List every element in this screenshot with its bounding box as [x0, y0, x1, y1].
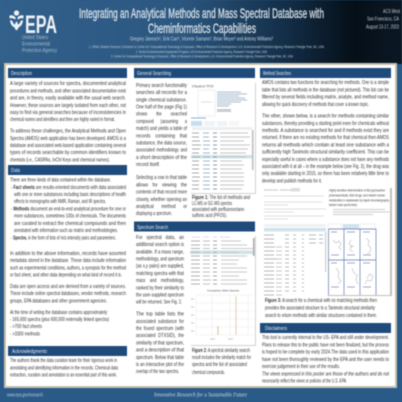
text: description: A large variety of sources for spectra, documented analytical [10, 81, 126, 87]
text: general searching [136, 83, 188, 217]
right column [260, 68, 392, 385]
text: spectrum search: mass and methodology, [136, 278, 184, 284]
heading: Data [8, 165, 127, 175]
text: metadata and sources: - 165,000 spectra (plus 600,000 externally linked spectra) [10, 317, 109, 323]
text: metadata and sources: - >3300 methods [10, 332, 40, 338]
heading: Acknowledgments: Acknowledgments [12, 349, 47, 355]
figure 1 caption [192, 195, 250, 219]
text: general searching: match) and yields a table of [136, 126, 187, 132]
affiliations: 2. Senior Environmental Employment Program, US Environmental Protection Agency, Research Triangle Park, USA [136, 50, 268, 54]
text: description: and are, in theory, easily available with the usual web search. [10, 96, 126, 102]
text: spectrum search: additional search option is [136, 242, 184, 248]
figure 1 caption: LC-MS or GC-MS spectra [192, 201, 232, 207]
figure 1: PFOS results screenshot [190, 82, 256, 194]
text: general searching: Selecting a row in that table [136, 175, 187, 181]
text: general searching: One half of the page (Fig 1) [136, 104, 187, 110]
text: disclaimers [262, 335, 389, 385]
figure 1 caption: sulfonic acid (PFOS). [192, 213, 227, 219]
text: spectrum search: is an interactive plot of the [136, 362, 184, 368]
text: disclaimers: exercise judgement in their use of the results. [262, 364, 340, 370]
text: spectrum search: and a description of that [136, 348, 184, 354]
text: spectrum search: the found spectrum (with [136, 326, 184, 332]
figure 1: PFOS results screenshot: 5 Results for "PFOS" [192, 84, 215, 88]
card title [329, 188, 389, 207]
conference info [366, 9, 400, 30]
footer url: www.epa.gov/research [6, 392, 43, 398]
text: spectrum search: The top table lists the [136, 312, 184, 318]
text: description: procedures and methods, and other associated documentation exist [10, 88, 126, 94]
text: general searching: single chemical substance. [136, 97, 187, 103]
heading: Method Searches: Method Searches [263, 71, 291, 77]
text: data kinds: effects to monographs with NMR, Raman, and IR spectra. [14, 199, 106, 205]
card tabs [328, 224, 375, 229]
text: data kinds: with one or more substances including basic descriptions of health [13, 192, 126, 198]
text: metadata and sources: These include online spectral databases, vendor methods, research [10, 291, 126, 297]
text: metadata and sources: Data are open access and are derived from a variety of sources. [10, 284, 126, 290]
heading: Description: Description [11, 71, 32, 77]
text: general searching: substance, the data source, [136, 140, 187, 146]
text: general searching: displaying a spectrum. [136, 211, 172, 217]
text: spectrum search: similarity of that spectrum, [136, 340, 184, 346]
text: spectrum search: overlap of the two spectra. [136, 369, 179, 375]
text: metadata and sources: - >700 fact sheets [10, 324, 42, 330]
heading: Method Searches [260, 68, 391, 78]
text: data kinds: more substances, sometimes 100s of chemicals. The documents [14, 214, 126, 220]
heading: Spectrum Search [134, 222, 255, 232]
text: description: To address these challenges, the Analytical Methods and Open [10, 129, 126, 135]
text: data kinds: annotated with information such as matrix and methodologies. [14, 228, 118, 234]
text: description: types of records searchable by common identifiers known to [10, 150, 126, 156]
card title: tandem mass spectrometry [329, 202, 357, 207]
heading: Acknowledgments [8, 346, 127, 356]
agency name [22, 35, 57, 54]
title [79, 5, 324, 36]
text: metadata and sources [10, 251, 126, 338]
icon: EPA flower [10, 10, 24, 30]
heading: Data: Data [11, 168, 21, 174]
affiliations: 1. ORAU Student Services Contractor to Center for Computational Toxicology & Exposure, Office of Research & Development, U.S. Environmental Protection Agency, Research Triangle Park, NC, USA [89, 45, 325, 49]
text: spectrum search: spectrum. Below that table [136, 355, 184, 361]
figure 2 caption: Figure 2: A spectral similarity search [192, 348, 250, 354]
figure 3: method detail card [327, 187, 392, 296]
text: general searching: compound (assuming a [136, 119, 188, 125]
text: spectrum search: (as x,y pairs) are supplied, [136, 264, 184, 270]
EPA wordmark: EPA [25, 11, 57, 39]
text: description: However, these sources are largely isolated from each other, not [10, 103, 126, 109]
agency name: United States [22, 35, 48, 41]
text: acknowledgments: extraction, curation and annotation is an essential part of this work. [10, 373, 117, 379]
heading: General Searching: General Searching [137, 71, 171, 77]
figure 1 caption: Figure 1: The list of methods and [192, 195, 250, 201]
heading: General Searching [134, 68, 255, 78]
agency name: Protection Agency [22, 48, 57, 54]
text: spectrum search: ranked by their similarity to [136, 285, 184, 291]
heading: Description [8, 68, 127, 78]
text: data kinds: - Fact sheets are results-oriented documents with data associated [11, 185, 126, 191]
structure grid [328, 229, 376, 295]
authors: Gregory Janesch¹, Erik Carr¹, Vicente Samano², Brian Meyer² and Antony Williams³ [130, 36, 273, 42]
text: method searches: develop and publish methods for it. [262, 179, 322, 185]
affiliations [89, 45, 325, 59]
figure 3: Tanimoto search results table [262, 186, 327, 296]
footer [0, 388, 402, 402]
EPA logo [10, 10, 57, 54]
text: spectrum search: For spectral data, an [136, 235, 184, 241]
text: general searching: shows the searched [136, 112, 187, 118]
text: acknowledgments [10, 358, 119, 379]
text: description: chemists (i.e., CASRNs, InChI Keys and chemical names). [10, 158, 110, 164]
heading: Disclaimers [260, 323, 391, 333]
text: disclaimers: necessarily reflect the views or policies of the U.S. EPA. [262, 379, 347, 385]
title: Cheminformatics Capabilities [148, 20, 256, 36]
text: general searching: searches all records for a [136, 90, 188, 96]
footer tagline: Innovative Research for a Sustainable Future [153, 392, 247, 398]
text: spectrum search: the user-supplied spectrum [136, 292, 184, 298]
text: metadata and sources: or fact sheet, and other data depending on what kind of record it is. [10, 273, 122, 279]
text: data kinds: - Methods document an end-to-end analytical procedure for one or [11, 206, 126, 212]
figure 2: spectral similarity screenshot [190, 235, 256, 346]
figure 1 caption: associated with perfluorooctane- [192, 207, 245, 213]
middle column [134, 68, 256, 376]
text: spectrum search: matching spectra with that [136, 271, 184, 277]
text: general searching: associated methodology and [136, 148, 187, 154]
text: data kinds: are curated to extract the chemical compounds and then [14, 221, 126, 227]
figure 3 caption [265, 298, 377, 319]
text: spectrum search: associated substance for [136, 319, 184, 325]
agency name: Environmental [22, 42, 50, 48]
text: description [10, 81, 127, 164]
text: general searching: contents of that record more [136, 190, 187, 196]
text: spectrum search: methodology, and spectrum [136, 256, 184, 262]
heading: Spectrum Search: Spectrum Search [137, 225, 168, 231]
text: general searching: a short description of the [136, 155, 187, 161]
text: spectrum search: associated DTXSID), the [136, 333, 184, 339]
text: metadata and sources: metadata stored in the database. These data include information [10, 258, 126, 264]
figure 2 caption: result includes the similarity match for [192, 355, 251, 361]
text: description: easy to find via general searches because of inconsistencies in [10, 110, 126, 116]
text: description: chemical names and identifiers and then are highly varied in format. [10, 117, 115, 123]
text: general searching: record itself. [136, 162, 160, 168]
text: general searching: closely, whether opening an [136, 197, 187, 203]
header band [0, 0, 402, 64]
text: metadata and sources: At the time of writing the database contains approximately: [10, 310, 108, 316]
figure 2 caption: spectra and the list of associated [192, 362, 247, 368]
text: spectrum search: will be returned. See Fig. 2. [135, 300, 182, 306]
text: metadata and sources: groups, EPA databases and other government agencies. [10, 299, 107, 305]
text: general searching: allows for viewing the [136, 182, 187, 188]
text: data kinds: There are three kinds of data contained within the database. [10, 178, 111, 184]
text: metadata and sources: such as experimental conditions, authors, a synopsis for the method [10, 265, 126, 271]
text: spectrum search: available. If a mass range, [136, 249, 184, 255]
text: acknowledgments: The authors thank the data curation team for their rigorous work in [10, 358, 117, 364]
text: metadata and sources: In addition to the above information, records have assorted [10, 251, 126, 257]
text: data kinds [10, 178, 126, 242]
text: general searching: Primary search functionality [136, 83, 187, 89]
text: data kinds: - Spectra, in the form of lists of m/z-intensity pairs and parameters. [11, 236, 116, 242]
heading: Disclaimers: Disclaimers [265, 326, 287, 332]
text: general searching: analytical method or [136, 204, 187, 210]
text: description: Spectra (AMOS) web application has been developed. AMOS is a [10, 136, 127, 142]
affiliations: 3. Center for Computational Toxicology & Exposure, Office of Research & Development, U.S. Environmental Protection Agency, Research Triangle Park, NC, USA [111, 55, 294, 59]
text: acknowledgments: annotating and identifying information in the records. Chemical data [10, 366, 119, 372]
figure 2 caption: chemical compounds. [192, 370, 225, 376]
results table [190, 237, 255, 284]
text: description: database and associated web-based application containing several [10, 143, 126, 149]
main panel [5, 64, 396, 387]
left column [8, 68, 127, 379]
figure 2 caption [192, 348, 251, 376]
overlap spectrum chart: Comparison Mass Spectra [207, 288, 239, 292]
text: method searches [262, 80, 390, 185]
text: general searching: records containing that [136, 133, 187, 139]
text: spectrum search [135, 235, 184, 375]
